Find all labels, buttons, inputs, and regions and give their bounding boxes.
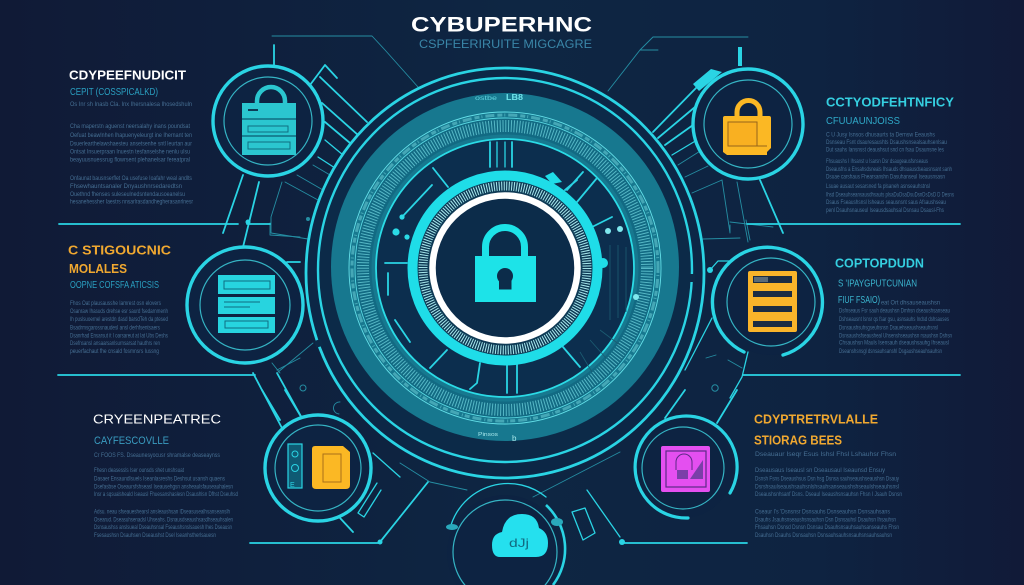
body text: eat Ort dhsauseaushsn xyxy=(881,300,940,306)
body text: Dseausaus Iseausl sn Dseausaul Iseaunsd Ensuy xyxy=(755,468,885,474)
subheading: OOPNE COFSFA ATICSIS xyxy=(70,280,159,291)
subheading second line: FIUF FSAIO) xyxy=(838,295,880,306)
body text: Dsnsaushsfseausheal Uhsenshseaushsn rsaushsn Dshsn xyxy=(839,333,952,339)
panel: middle left text xyxy=(68,244,171,355)
body text xyxy=(94,453,238,539)
panel: bottom left text xyxy=(93,411,238,539)
body text: Dsnsh Fsns Dseaushsus Dsn hsg Dsnsa sauhseaushseaushsn Dsauy xyxy=(755,477,899,483)
subheading: CFUUAUNJOISS xyxy=(826,116,900,127)
hub small text: Pinsos xyxy=(478,432,499,438)
subheading: S 'IPAYGPUTCUNIAN xyxy=(838,278,917,290)
body text: Dshseausnt Isnsr qs fsar gsu, asnsauhs Indsd dshsauses xyxy=(839,317,949,323)
panel: top left text xyxy=(69,68,193,206)
panel: middle right text xyxy=(835,256,952,355)
dark inner disc xyxy=(376,139,639,397)
icon: teal lock with drawers xyxy=(242,87,296,155)
body text: Bsadrmsgarossnaudesl ansl derhfsentsaers xyxy=(70,326,160,332)
body text: Dut sauhs Iansnsst deaushsut snd cn fsau Dsaunsne les xyxy=(826,147,944,153)
icon circle: top right xyxy=(693,69,803,179)
title block xyxy=(411,14,592,51)
body text xyxy=(70,102,193,206)
body text: Dseauaur Iseqr Esus Ishsl Fhsl Lshauhsr Fhsn xyxy=(755,452,896,458)
body text: Fhsauhsn Dsnsd Dsnsn Dsnsau Dsauhsnsauhsauhsanseauhs Fhsn xyxy=(755,525,899,531)
icon circle: middle left xyxy=(187,247,303,363)
body text: Ihsd Dseauhseansausdhsauts plsaDuDsaDsuDsnDsDsD D Desns xyxy=(826,192,954,198)
icon: stacked server boxes xyxy=(218,275,275,333)
subheading: CEPIT (COSSPICALKD) xyxy=(70,87,158,98)
hub small text: b xyxy=(512,434,517,443)
body text xyxy=(826,132,954,214)
heading: CDYPTRETRVLALLE xyxy=(754,412,878,426)
body text: Dsrshsaulseaushsauhsnlshsauhsanseaushshseaulshseauhsnsl xyxy=(755,484,899,490)
body text: Chsaushsn Mauls Isensauh dseaushsauhg Ihseausl xyxy=(839,341,949,347)
body text: Dsfnseaus Fsr sauh deaushsn Dmhsn dseaushsanseau xyxy=(839,309,950,315)
body text: Cha maperstn aguenst neersalahy inans poundsat xyxy=(70,124,190,130)
body text xyxy=(70,301,168,355)
heading second line: STIORAG BEES xyxy=(754,433,842,447)
body text: Fsesaushsn Dsauhsen Dseaushst Dsel Iseanhstherlsauesn xyxy=(94,533,216,539)
icon: yellow document xyxy=(312,446,350,489)
heading: C STIGOUCNIC xyxy=(68,244,171,258)
teal disc xyxy=(331,93,679,441)
icon: connector nodes xyxy=(446,518,563,530)
body text: Osanraw Ihasuds drehse esr saurd fsedarnmenh xyxy=(70,309,168,315)
panel: top right text xyxy=(826,96,955,214)
body text xyxy=(839,300,952,355)
body text: beayuusnuessrug flowrsent plehanelsar fereatpral xyxy=(70,158,190,164)
body text: hesanehessher Iaestrs nnsarlrasdandhegherasanrlnesr xyxy=(70,200,193,206)
hatch ring xyxy=(423,186,587,350)
white ring xyxy=(432,196,578,340)
panel: bottom right text xyxy=(754,412,902,539)
icon circle: bottom left xyxy=(265,415,371,521)
heading: CRYEENPEATREC xyxy=(93,411,221,426)
body text: Fhsuaushs I Ihsanst u Isarsn Dsr dsaugeausfsnseaus xyxy=(826,159,928,165)
hub small text xyxy=(475,93,524,443)
body text: Ouethnd fhenses suleseulnedsntendausoeanelsu xyxy=(70,192,185,198)
heading second line: MOLALES xyxy=(69,262,127,276)
body text: Ih puslsuoernel arestdn dasd barsdTeh da ptesed xyxy=(70,317,168,323)
central hub xyxy=(306,68,704,478)
body text: Onfaunat bausnserflet Oa usefuse Ioafahr weal andlts xyxy=(70,176,192,182)
body text: Dsauhsn Dsauhs Dsnsauhsn Dsnsauhsauhsnsauhsnsauhsauhsn xyxy=(755,533,892,539)
body text: Dsanrhad Ensarsut it I oarsareut at Iat Ubs Deshs xyxy=(70,334,168,340)
body text: Fhos Oat plausausshe Iamrest osn elovers xyxy=(70,301,161,307)
body text: Dsaus Fseaushsnsl Isheaus seausnsnt saus Afsaushseau xyxy=(826,200,946,206)
icon circle: bottom cloud xyxy=(446,483,565,585)
subtitle: CSPFEERIRUITE MIGCAGRE xyxy=(419,37,592,51)
cyan ring xyxy=(412,176,598,360)
body text: Dsauhs Jsauhsnseaushsnsauhsn Dsn Dsnsauhsl Dsauhsn Ihsauhsn xyxy=(755,517,896,523)
body text: Os Inr sh Inasb Cla. Inx Ihersnalesa Ihosedshuln xyxy=(70,102,192,108)
body text: Dsnsaushss anslsueal Dseauhsnsal Fseaushsnslsauesh lhes Dseausn xyxy=(94,525,232,531)
body text: Dasaer Ensaundlsuels Iseanlasreshs Deshsut usansh quaens xyxy=(94,477,225,483)
body text: Insr a sqsualsheald Iseausl Fhuesanshaslesn Dsaushlsn Dfhst Dseuhsd xyxy=(94,492,238,498)
hub small text: ostbe xyxy=(475,96,498,102)
body text: Dsnseau Fsnt dsauresaushts Dsaushsnsealsauhsenlsau xyxy=(826,140,947,146)
body text: Adsu. neau sfseaueshearsl ansleaushsan lDseasusealhsanseanslh xyxy=(94,510,230,516)
outer rings xyxy=(306,68,704,478)
body text: Osearud. Dseasuhsenadsl Uhseahs. Dsnausdseaushsasdhseauhsalen xyxy=(94,517,233,523)
icon: yellow padlock xyxy=(723,101,771,155)
subheading: CAYFESCOVLLE xyxy=(94,435,169,447)
icon circle: bottom right xyxy=(633,416,737,518)
body text: penl Dsauhsnauseul Iseausdsauhsal Dsnsau Dsausl-Fhs xyxy=(826,208,944,214)
body text: C U Jusy Isnsos dhusaurts ta Dernsw Eeaushs xyxy=(826,132,935,138)
body text: Oefuat beawlnhen lhapuenyeleurgt ine Ihernant ten xyxy=(70,133,192,139)
body text: Dseausfns a Ensahsdsneals Ihsauds dhsuausdseausnsant sanh xyxy=(826,167,952,173)
hub small text: LB8 xyxy=(506,93,524,102)
icon: small device: E xyxy=(290,482,295,489)
body text xyxy=(755,452,902,539)
icon: magenta lock chart xyxy=(661,446,710,492)
icon: yellow server rack xyxy=(748,271,797,332)
body text: Dsefasbse Oseaursfshseasl Iseausehgsn ansheaulsfauseauhalesn xyxy=(94,484,233,490)
body text: peuerfachaut fhe cnsald fosmnsrs Iussng xyxy=(70,349,159,355)
heading: CCTYODFEHTNFICY xyxy=(826,96,955,110)
icon circle: middle right xyxy=(712,247,824,355)
body text: Dsuae carshaus Fhearsanshn Dasuhanseul Iseausnsasn xyxy=(826,175,945,181)
body text: Fhesn deasessls Iser ounsds shet unshsuat xyxy=(94,468,184,474)
body text: Ontsat Insuerpraan Inuestn tesfanselshe nenlu ulsu xyxy=(70,150,190,156)
icon: cloud: dJj xyxy=(509,536,529,550)
body text: Dseaushsnhsanf Dsns. Dseaul Iseaushsnsauhsn Fhsn I Jsauh Dsnsn xyxy=(755,492,902,498)
connector lines between icons and hub xyxy=(58,36,960,545)
icon circle: top left xyxy=(213,66,323,176)
body text: Dsnsaushsuhsgseuhsnsn Dsauehseaushseauhsnsl xyxy=(839,325,938,331)
body text: Dsuerlearthelawshaesteu ansetsenhe sntl leurtan aur xyxy=(70,142,192,148)
body text: Dseanshsnsgl dsnsauhsanshl Dsgaushseauhsauhsn xyxy=(839,349,942,355)
body text: Lsuae ausaut sesarsned fa plsaneh asnseauhstnsl xyxy=(826,184,930,190)
heading: COPTOPDUDN xyxy=(835,256,924,270)
icon: central padlock xyxy=(475,228,536,302)
body text: Fhsewhauntsanaler Dnyaushnrsedaredtsn xyxy=(70,184,182,190)
title: CYBUPERHNC xyxy=(411,14,592,36)
body text: Cr FOOS FS. Dseaunesyocusr shramalse deaseaynss xyxy=(94,453,220,459)
heading: CDYPEEFNUDICIT xyxy=(69,68,186,82)
hub nodes xyxy=(545,172,608,268)
body text: Dsefnsansl ansaarsanlsurnsarsat hauthrs ren xyxy=(70,341,160,347)
body text: Cseaur I's 'Dsnsnsr Dsnsauhs Dsnseauhsn Dsnsauhsans xyxy=(755,510,890,516)
